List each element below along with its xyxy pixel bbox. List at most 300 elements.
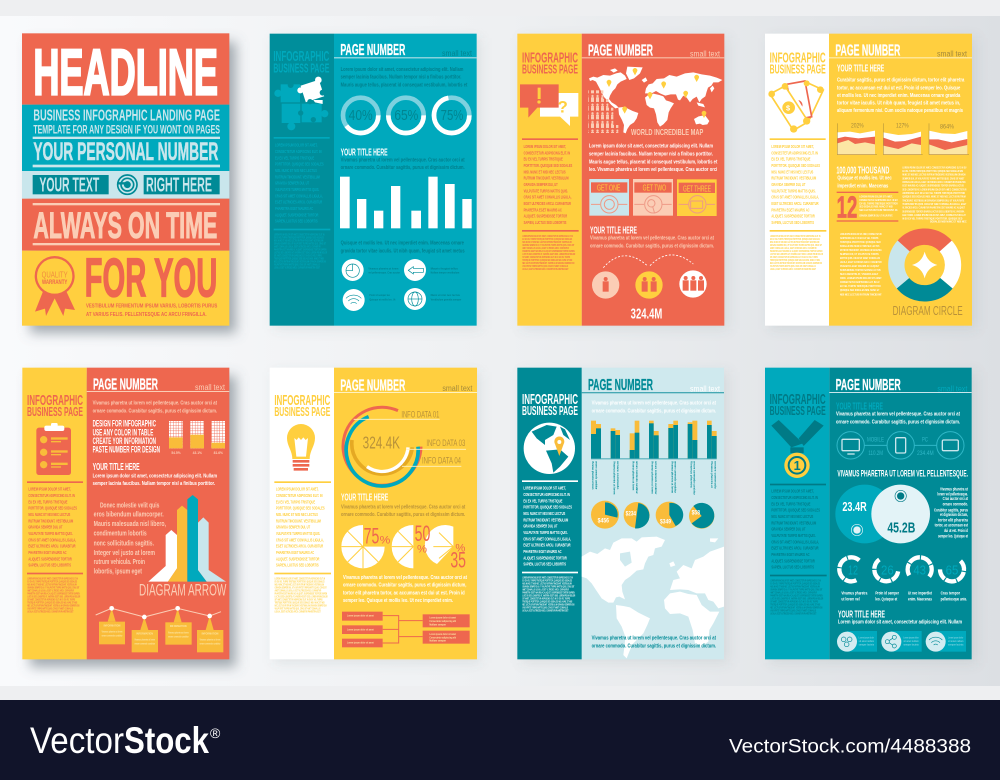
sidebar: EU EX VEL TURPIS TRISTIQUE <box>275 156 314 161</box>
sidebar: SIT AMET, CONSECTETUR ADIPISCING ELIT. IN EU EX VEL TURPIS <box>274 254 322 258</box>
sidebar: SIT AMET, CONSECTETUR ADIPISCING ELIT. IN EU EX VEL TURPIS <box>770 600 819 604</box>
flow diagram: Consectetur adipiscing elit <box>429 619 456 623</box>
sidebar: GRAVIDA SEMPER DUI, UT <box>523 524 558 529</box>
ring labels: enim. Maecenas <box>908 596 932 601</box>
bottom cards: semper lacinia <box>948 643 964 647</box>
sidebar: VULPUTATE TURPIS MATTIS QUIS. <box>275 187 319 192</box>
pie charts: 75 <box>364 523 379 548</box>
sidebar: PHARETRA EGET MAURIS AC ALIQUET. SUSPENDISSE TORTOR SAPIEN <box>274 248 327 252</box>
sidebar: SAPIEN, LUCTUS SED LOBORTIS <box>771 220 814 225</box>
sidebar: VULPUTATE TURPIS MATTIS QUIS. CRAS SIT AMET CONVALLIS <box>275 607 321 611</box>
sidebar: CRAS SIT AMET CONVALLIS LIGULA, <box>275 194 323 199</box>
ring charts: 65 <box>946 563 958 578</box>
sidebar: EU EX VEL TURPIS TRISTIQUE <box>28 500 68 505</box>
title: your title here: YOUR TITLE HERE <box>93 462 140 473</box>
sidebar: BUSINESS PAGE <box>770 62 826 77</box>
paragraph: Quisque et mollis leo. Ut nec imperdiet enim. Maecenas ornare <box>341 240 464 246</box>
sidebar: EGET ULTRICIES ARCU. CURABITUR <box>771 201 819 206</box>
right text: semper leo. Quisque et <box>938 534 968 539</box>
text column lower: RUTRUM TINCIDUNT. VESTIBULUM GRAVIDA <box>840 248 882 252</box>
diagram circle <box>885 225 965 305</box>
paragraph: Vivamus pharetra ut lorem vel pellentesque. Cras auctor orci at <box>590 236 714 242</box>
sidebar <box>517 368 582 659</box>
sidebar: EGET ULTRICIES ARCU. CURABITUR <box>275 200 322 205</box>
radial chart <box>343 407 466 486</box>
sidebar: INFOGRAPHIC <box>522 392 578 408</box>
sidebar: ALIQUET. SUSPENDISSE TORTOR <box>523 556 567 561</box>
ring charts: 26 <box>881 563 894 578</box>
sidebar: VULPUTATE TURPIS MATTIS QUIS. <box>28 531 73 536</box>
panel shadows <box>30 38 976 667</box>
sidebar: SIT AMET, CONSECTETUR ADIPISCING ELIT. IN EU EX VEL TURPIS <box>522 597 571 601</box>
sidebar: NEC LECTUS RUTRUM TINCIDUNT. VESTIBULUM GRAVIDA SEMPER DUI <box>27 604 80 608</box>
sidebar: EU EX VEL TURPIS TRISTIQUE PORTTITOR. QUISQUE SED SODALES <box>770 238 820 241</box>
sidebar: EU EX VEL TURPIS TRISTIQUE PORTTITOR. QUISQUE SED SODALES <box>274 236 324 240</box>
sidebar: EU EX VEL TURPIS TRISTIQUE <box>523 499 563 504</box>
sidebar: NEC LECTUS RUTRUM TINCIDUNT. VESTIBULUM GRAVIDA SEMPER DUI <box>770 606 823 610</box>
icon grid <box>342 259 461 311</box>
list: USE ANY COLOR IN TABLE <box>93 427 153 437</box>
ring labels: Vivamus pharetra <box>841 591 868 596</box>
indented paragraph: nonc sollicitudin sagittis. <box>94 539 154 548</box>
sidebar: LIGULA, EGET ULTRICIES ARCU. CURABITUR PHARETRA EGET <box>275 610 321 614</box>
device icons row: MOBILE <box>867 437 884 444</box>
text column right: QUISQUE SED SODALES NISI. NUNC ET NISI NEC LECTUS RUTRUM <box>902 195 966 199</box>
stat: 12: GRAVIDA SEMPER DUI, UT VULPUTATE <box>859 213 893 217</box>
sidebar: TRISTIQUE PORTTITOR. QUISQUE SED SODALES NISI. NUNC ET NISI <box>275 601 325 605</box>
people circles <box>592 270 707 299</box>
paragraph: Vivamus pharetra ut lorem vel pellentesque. Cras auctor orci at <box>343 575 467 581</box>
sidebar: VULPUTATE TURPIS MATTIS QUIS. <box>523 530 568 535</box>
pie charts: $456 <box>598 517 609 524</box>
panel: puzzle teal page <box>270 34 477 326</box>
sidebar: CONSECTETUR ADIPISCING ELIT. IN <box>524 151 570 156</box>
logo: Vector <box>30 720 124 761</box>
world map <box>582 537 724 658</box>
bottom cards: Lorem ipsum dolor <box>903 635 919 639</box>
sidebar: RUTRUM TINCIDUNT. VESTIBULUM <box>771 176 816 181</box>
sidebar: LOREM IPSUM DOLOR SIT AMET, CONSECTETUR ADIPISCING ELIT. IN <box>770 235 821 238</box>
paragraph: semper leo. Quisque et mollis leo. Ut nec imperdiet enim. <box>343 598 453 604</box>
sidebar: LOREM IPSUM DOLOR SIT AMET, CONSECTETUR ADIPISCING ELIT. IN <box>27 577 78 581</box>
bottom cards: Lorem ipsum dolor <box>859 635 874 639</box>
icon: globe with pin <box>524 423 575 474</box>
sidebar: LOREM IPSUM DOLOR SIT AMET, CONSECTETUR ADIPISCING ELIT. IN <box>274 233 325 237</box>
title: your title here: YOUR TITLE HERE <box>838 609 885 620</box>
text column right: TINCIDUNT. VESTIBULUM GRAVIDA SEMPER DUI, UT VULPUTATE <box>902 198 964 202</box>
paragraph: Mauris augue tellus, placerat id consequat vestibulum, lobortis et <box>341 82 467 88</box>
stacked bar chart: ornare commodo curabitur <box>693 461 697 496</box>
radial chart: INFO DATA 01 <box>401 409 439 419</box>
stacked bar chart: Vivamus pharetra ut lorem <box>591 461 595 490</box>
sidebar: GRAVIDA SEMPER DUI, UT <box>275 181 310 186</box>
sidebar: EU EX VEL TURPIS TRISTIQUE PORTTITOR. QUISQUE SED SODALES <box>275 580 325 584</box>
header: PAGE NUMBER <box>340 42 405 59</box>
header: small text <box>690 48 721 58</box>
waffle charts: 81.6% <box>214 450 223 455</box>
text column right: LOREM IPSUM DOLOR SIT AMET, CONSECTETUR ADIPISCING ELIT. IN EU <box>902 165 966 169</box>
sidebar: SIT AMET, CONSECTETUR ADIPISCING ELIT. IN EU EX VEL TURPIS <box>522 256 571 259</box>
cards <box>589 179 717 216</box>
sidebar: LIGULA, EGET ULTRICIES ARCU. CURABITUR PHARETRA EGET <box>770 268 817 271</box>
sidebar: INFOGRAPHIC <box>27 393 83 409</box>
header: PAGE NUMBER <box>588 43 653 60</box>
icon grid: Nunc et nisi nec lectus <box>431 293 461 297</box>
sidebar: NISI. NUNC ET NISI NEC LECTUS RUTRUM TINCIDUNT. VESTIBULUM <box>522 242 572 244</box>
pie charts: $58 <box>692 509 700 516</box>
stat: 12: CONSECTETUR ADIPISCING ELIT. IN EU <box>859 198 898 202</box>
coral band <box>22 199 229 251</box>
ring labels: Proin id semper <box>875 591 899 596</box>
sidebar: NISI. NUNC ET NISI NEC LECTUS RUTRUM TINCIDUNT. VESTIBULUM <box>275 584 324 587</box>
title: your title here: YOUR TITLE HERE <box>837 64 885 75</box>
title: HEADLINE: HEADLINE <box>33 35 218 108</box>
radial chart: INFO DATA 04 <box>422 455 461 465</box>
paragraph <box>343 575 467 604</box>
header: PAGE NUMBER <box>835 43 900 60</box>
paragraph: ornare commodo. Curabitur sagittis, purus et dignissim dictum, <box>343 583 467 589</box>
sidebar <box>22 368 87 659</box>
sidebar: CRAS SIT AMET CONVALLIS LIGULA, <box>524 195 571 200</box>
paragraph: Lorem ipsum dolor sit amet, consectetur adipiscing elit. Nullam <box>93 473 217 479</box>
indented paragraph: Donec molestie velit quis <box>100 500 159 509</box>
panel: diagram circle yellow page <box>765 34 972 326</box>
device icons row: PC <box>922 437 928 444</box>
icon: puzzle <box>274 77 328 130</box>
timeline with notes: Vivamus pharetra ut lorem <box>102 630 123 634</box>
paragraph <box>341 67 467 88</box>
sidebar: VULPUTATE TURPIS MATTIS QUIS. <box>771 189 816 194</box>
timeline with notes: Vivamus pharetra ut lorem <box>168 630 189 634</box>
paragraph: gravida tortor vitae iaculis. Ut nibh quam, feugiat sit amet metus <box>341 248 465 254</box>
header: small text <box>442 383 473 393</box>
area charts: 127% <box>896 123 909 130</box>
ring labels: leo. Quisque et <box>875 596 898 601</box>
sidebar: AMET CONVALLIS LIGULA, EGET ULTRICIES ARCU. CURABITUR <box>27 589 74 593</box>
stat: 12: 12 <box>837 189 857 224</box>
stat: 12: SED SODALES NISI. NUNC ET NISI <box>859 205 893 209</box>
right text: tortor elit pharetra <box>938 518 968 523</box>
sidebar: EU EX VEL TURPIS TRISTIQUE PORTTITOR. QUISQUE SED SODALES <box>27 580 78 584</box>
yellow band <box>22 247 229 326</box>
title: your title here: YOUR TITLE HERE <box>341 493 389 504</box>
sidebar: CRAS SIT AMET CONVALLIS LIGULA, <box>771 195 819 200</box>
pie charts: $349 <box>660 518 671 525</box>
timeline with notes: INFORMATION <box>202 631 218 635</box>
waffle charts: 54.5% <box>171 450 181 455</box>
light band: RIGHT HERE <box>146 175 212 197</box>
panel: globe light blue page <box>517 368 724 659</box>
sidebar: NISI. NUNC ET NISI NEC LECTUS <box>524 170 566 175</box>
sidebar: PORTTITOR. QUISQUE SED SODALES <box>523 505 572 510</box>
sidebar: INFOGRAPHIC <box>273 49 329 65</box>
cards: GET TWO <box>643 183 666 193</box>
sidebar: RUTRUM TINCIDUNT. VESTIBULUM <box>276 519 321 524</box>
timeline with notes: ornare commodo curabitur <box>200 642 220 646</box>
venn diagram: 45.2B <box>887 521 915 537</box>
header: small text <box>937 48 968 58</box>
cards: GET ONE <box>597 183 621 193</box>
people pictogram <box>588 90 618 133</box>
stat: 12: NEC LECTUS RUTRUM TINCIDUNT. VE <box>859 208 898 212</box>
sidebar: PORTTITOR. QUISQUE SED SODALES <box>771 163 820 168</box>
ring charts: 43 <box>913 563 926 578</box>
sidebar: NISI. NUNC ET NISI NEC LECTUS RUTRUM TINCIDUNT. VESTIBULUM <box>522 583 572 586</box>
sidebar: CRAS SIT AMET CONVALLIS LIGULA, <box>28 538 76 543</box>
sidebar: NISI. NUNC ET NISI NEC LECTUS <box>523 511 566 516</box>
header: PAGE NUMBER <box>836 377 901 394</box>
sidebar: PHARETRA EGET MAURIS AC <box>771 552 810 557</box>
sidebar: RUTRUM TINCIDUNT. VESTIBULUM <box>523 518 568 523</box>
text column right: EGET MAURIS AC ALIQUET. SUSPENDISSE TORTOR SAPIEN LUCTUS <box>902 184 964 188</box>
waffle charts: 43.1% <box>193 450 202 455</box>
stacked bar chart <box>591 421 717 496</box>
text column right: EGET ODIO. LOREM IPSUM DOLOR SIT AMET, CONSECTETUR ELIT <box>902 213 966 217</box>
header: PAGE NUMBER <box>588 377 653 394</box>
timeline with notes: INFORMATION <box>136 631 153 635</box>
text column lower: TRISTIQUE PORTTITOR. QUISQUE SED <box>840 240 881 244</box>
sidebar: LUCTUS SED LOBORTIS AT, VIVERRA EGET ODIO. LOREM IPSUM DOLOR <box>770 253 823 256</box>
paragraph: ornare commodo. Curabitur sagittis, purus et dignissim dictum. <box>590 243 714 249</box>
paragraph: ornare commodo. Curabitur sagittis, purus et dignissim dictum. <box>341 512 466 518</box>
paragraph <box>592 401 716 414</box>
ring labels <box>841 591 967 601</box>
sidebar <box>765 34 829 326</box>
sidebar: LUCTUS SED LOBORTIS AT, VIVERRA EGET ODIO. LOREM IPSUM DOLOR <box>275 595 328 599</box>
bottom cards: sit amet nullam <box>903 639 919 643</box>
map caption: WORLD INCREDIBLE MAP <box>631 127 703 137</box>
radial chart: 324.4K <box>363 432 400 452</box>
text column lower: LIGULA, EGET ULTRICIES ARCU. CURABITUR <box>840 260 882 264</box>
paragraph: et mollis leo. Ut nec imperdiet enim. Maecenas ornare gravida <box>837 93 961 99</box>
flow diagram: Lorem ipsum dolor sit amet <box>347 614 374 618</box>
sidebar: CONSECTETUR ADIPISCING ELIT. IN <box>28 493 75 498</box>
header: small text <box>937 383 968 393</box>
indented paragraph: condimentum lobortis <box>94 529 147 538</box>
sidebar: AMET CONVALLIS LIGULA, EGET ULTRICIES ARCU. CURABITUR <box>274 245 321 249</box>
indented paragraph: eros bibendum ullamcorper. <box>94 510 164 519</box>
sidebar: PORTTITOR. QUISQUE SED SODALES <box>524 163 573 168</box>
sidebar: GRAVIDA SEMPER DUI, UT VULPUTATE TURPIS MATTIS QUIS. CRAS SIT <box>27 586 80 590</box>
paragraph: semper lacinia faucibus. Nullam tempor nisl a finibus porttitor. <box>93 481 215 487</box>
header: small text <box>690 383 721 393</box>
icon: speech bubbles <box>520 84 578 126</box>
sidebar: LUCTUS SED LOBORTIS AT, VIVERRA EGET ODIO. LOREM IPSUM DOLOR <box>27 595 81 599</box>
paragraph: Lorem ipsum dolor sit amet, consectetur adipiscing elit. Nullam <box>341 67 463 73</box>
sidebar: GRAVIDA SEMPER DUI, UT <box>276 525 311 530</box>
sidebar: VULPUTATE TURPIS MATTIS QUIS. CRAS SIT AMET CONVALLIS <box>522 265 568 268</box>
paragraph: Vivamus pharetra ut lorem vel pellentesque. Cras auctor orci at <box>93 401 217 407</box>
sidebar: RUTRUM TINCIDUNT. VESTIBULUM <box>524 176 569 181</box>
sidebar <box>270 34 334 326</box>
list: PASTE NUMBER FOR DESIGN <box>93 445 160 455</box>
sidebar: SIT AMET, CONSECTETUR ADIPISCING ELIT. IN EU EX VEL TURPIS <box>770 256 818 259</box>
teal band <box>22 105 229 171</box>
sidebar: BUSINESS PAGE <box>522 62 578 77</box>
sidebar <box>765 368 829 659</box>
panel: world map coral page <box>517 34 724 326</box>
world map <box>589 67 722 133</box>
venn diagram <box>835 485 930 543</box>
sidebar: LIGULA, EGET ULTRICIES ARCU. CURABITUR PHARETRA EGET <box>522 268 569 271</box>
sidebar: INFOGRAPHIC <box>522 50 578 66</box>
indented paragraph: rutrum vehicula. Proin <box>94 557 145 566</box>
icon grid: Quisque et mollis leo. Ut <box>369 297 395 301</box>
text column right: EX VEL TURPIS TRISTIQUE PORTTITOR. QUISQUE SED SODALES NISI <box>902 169 963 173</box>
flow diagram: Lorem ipsum dolor sit amet <box>347 641 374 645</box>
text column lower: SUSPENDISSE TORTOR SAPIEN LUCTUS <box>840 268 881 272</box>
text column lower: MATTIS QUIS. CRAS SIT AMET CONVALLIS <box>840 256 880 260</box>
ring labels: ut lorem vel <box>841 596 860 601</box>
sidebar: NISI. NUNC ET NISI NEC LECTUS <box>276 512 318 517</box>
sidebar: AMET CONVALLIS LIGULA, EGET ULTRICIES ARCU. CURABITUR <box>522 247 569 250</box>
stacked bar chart: ornare commodo curabitur <box>674 461 678 494</box>
sidebar: GRAVIDA SEMPER DUI, UT <box>524 182 558 187</box>
paragraph: tortor elit pharetra tortor, ac accumsan est dui ut est. Proin id <box>343 590 465 596</box>
sidebar: SAPIEN, LUCTUS SED LOBORTIS <box>276 563 319 568</box>
sidebar: LUCTUS SED LOBORTIS AT, VIVERRA EGET ODIO. LOREM IPSUM DOLOR <box>522 594 576 598</box>
paragraph <box>341 504 466 518</box>
panel: info data yellow page <box>270 368 477 659</box>
yellow band: VESTIBULUM FERMENTUM IPSUM VARIUS, LOBORTIS PURUS <box>86 303 218 309</box>
flow diagram: Lorem ipsum dolor sit amet <box>429 616 456 620</box>
paragraph: Vivamus pharetra ut lorem vel pellentesque. Cras auctor orci at <box>341 157 465 163</box>
text column right: SODALES NISI NUNC ET NISI NEC <box>930 220 967 224</box>
icon grid: Proin id semper leo <box>369 293 390 297</box>
pie charts: 50 <box>415 521 430 546</box>
sidebar: NEC LECTUS RUTRUM TINCIDUNT. VESTIBULUM GRAVIDA SEMPER DUI <box>770 262 822 265</box>
text column lower: ODIO. LOREM IPSUM DOLOR SIT AMET <box>840 276 882 280</box>
flow diagram: Consectetur adipiscing elit <box>429 635 456 639</box>
icon: speech bubbles: ? <box>558 97 568 116</box>
flow diagram <box>342 612 470 647</box>
timeline with notes: Vivamus pharetra ut lorem <box>134 638 155 642</box>
sidebar: EU EX VEL TURPIS TRISTIQUE PORTTITOR. QUISQUE SED SODALES <box>522 579 573 583</box>
sidebar: NISI. NUNC ET NISI NEC LECTUS <box>275 168 317 173</box>
paragraph: Vivamus pharetra ut lorem vel pellentesque. Cras auctor orci at <box>592 635 716 641</box>
title: your title here: YOUR TITLE HERE <box>590 226 637 237</box>
paragraph: semper lacinia faucibus. Nullam tempor nisl a finibus porttitor. <box>341 75 462 81</box>
device icons row: 234.4M <box>917 450 934 457</box>
sidebar: PHARETRA EGET MAURIS AC <box>276 550 314 555</box>
area charts: 202% <box>851 123 864 130</box>
venn diagram: 23.4R <box>842 499 867 514</box>
icon grid: Mauris feugiat tellus <box>431 266 459 270</box>
icon: clipboard <box>36 423 71 475</box>
footer bar <box>0 700 1000 780</box>
icon: quality badge: WARRANTY <box>42 280 67 286</box>
paragraph: Vivamus pharetra ut lorem vel pellentesque. Cras auctor orci at <box>592 401 716 407</box>
sidebar: SAPIEN, LUCTUS SED LOBORTIS <box>28 563 71 568</box>
sidebar: VULPUTATE TURPIS MATTIS QUIS. CRAS SIT AMET CONVALLIS <box>770 265 816 268</box>
sidebar: PHARETRA EGET MAURIS AC ALIQUET. SUSPENDISSE TORTOR SAPIEN <box>27 592 80 596</box>
stacked bar chart: Vivamus pharetra <box>689 461 693 488</box>
ring labels: pellentesque ante. <box>941 596 967 601</box>
icon: quality badge <box>35 256 75 316</box>
teal band: TEMPLATE FOR ANY DESIGN IF YOU WONT ON PAGES <box>33 122 220 136</box>
panel: headline cover <box>22 33 229 326</box>
text column right: NUNC ET NISI NEC LECTUS RUTRUM TINCIDUNT. VESTIBULUM GRAVIDA <box>902 173 966 177</box>
radial chart: INFO DATA 03 <box>426 438 465 448</box>
ring labels: Ut nec imperdiet <box>908 591 932 596</box>
sidebar: GRAVIDA SEMPER DUI, UT <box>771 182 806 187</box>
sidebar: LOREM IPSUM DOLOR SIT AMET, CONSECTETUR ADIPISCING ELIT. IN <box>275 577 325 581</box>
sidebar: BUSINESS PAGE <box>273 60 330 75</box>
sidebar: AMET CONVALLIS LIGULA, EGET ULTRICIES ARCU. CURABITUR <box>522 588 569 592</box>
sidebar: BUSINESS PAGE <box>274 404 331 419</box>
sidebar: EU EX VEL TURPIS TRISTIQUE <box>524 157 563 162</box>
sidebar: CONSECTETUR ADIPISCING ELIT. IN <box>275 149 322 154</box>
sidebar: EGET ULTRICIES ARCU. CURABITUR <box>771 546 819 551</box>
text column lower: SEMPER DUI, UT VULPUTATE TURPIS <box>840 252 879 256</box>
text column right: IN EU EX VEL TURPIS TRISTIQUE PORTTITOR. QUISQUE SED <box>902 217 962 221</box>
stat: 100,000 thousand <box>836 165 892 189</box>
list: DESIGN FOR INFOGRAPHIC <box>93 418 156 428</box>
text column right: SEMPER DUI, UT VULPUTATE TURPIS MATTIS QUIS. CRAS SIT AMET <box>902 176 965 180</box>
text column right: SED LOBORTIS AT. LOREM IPSUM DOLOR SIT AMET, CONSECTETUR <box>902 187 966 191</box>
right text: ornare commodo. <box>943 502 968 507</box>
sidebar: PHARETRA EGET MAURIS AC ALIQUET. SUSPENDISSE TORTOR SAPIEN <box>770 250 823 253</box>
sidebar: RUTRUM TINCIDUNT. VESTIBULUM <box>28 519 73 524</box>
device icons row: 110.2M <box>868 450 883 457</box>
right text: Cras auctor orci at <box>943 496 968 501</box>
light band: YOUR TEXT <box>39 175 99 197</box>
sidebar: LOREM IPSUM DOLOR SIT AMET, <box>771 144 814 149</box>
sidebar: VULPUTATE TURPIS MATTIS QUIS. <box>276 531 320 536</box>
sidebar: LUCTUS SED LOBORTIS AT, VIVERRA EGET ODIO. LOREM IPSUM DOLOR <box>522 253 576 256</box>
right text: Curabitur sagittis, purus <box>934 507 968 512</box>
sidebar: PORTTITOR. QUISQUE SED SODALES <box>771 508 820 513</box>
sidebar: EU EX VEL TURPIS TRISTIQUE PORTTITOR. QUISQUE SED SODALES <box>770 582 821 586</box>
sidebar: ALIQUET. SUSPENDISSE TORTOR <box>275 213 319 218</box>
donut charts: 65% <box>394 108 418 124</box>
sidebar: PORTTITOR. QUISQUE SED SODALES <box>28 506 77 511</box>
header: PAGE NUMBER <box>340 378 405 395</box>
sidebar: LOREM IPSUM DOLOR SIT AMET, <box>771 489 814 494</box>
sidebar: VULPUTATE TURPIS MATTIS QUIS. CRAS SIT AMET CONVALLIS <box>274 263 320 267</box>
sidebar: PHARETRA EGET MAURIS AC <box>771 208 810 213</box>
sidebar: RUTRUM TINCIDUNT. VESTIBULUM <box>275 175 320 180</box>
sidebar: SAPIEN, LUCTUS SED LOBORTIS <box>275 219 318 224</box>
logo: Stock <box>124 720 209 761</box>
donut charts: 40% <box>349 108 373 124</box>
icon: quality badge: QUALITY <box>42 269 68 279</box>
text column lower: NISI NEC LECTUS RUTRUM TINCIDUNT <box>840 293 882 297</box>
text column lower: LOREM IPSUM DOLOR SIT AMET, CONSECTETUR <box>840 232 882 236</box>
indented paragraph <box>94 500 166 575</box>
sidebar: EU EX VEL TURPIS TRISTIQUE <box>276 500 315 505</box>
text column right: ULTRICIES ARCU. CURABITUR PHARETRA EGET MAURIS AC ALIQUET <box>902 206 965 210</box>
sidebar: PHARETRA EGET MAURIS AC ALIQUET. SUSPENDISSE TORTOR SAPIEN <box>770 594 823 598</box>
sidebar: VULPUTATE TURPIS MATTIS QUIS. CRAS SIT AMET CONVALLIS <box>522 606 568 610</box>
sidebar: INFOGRAPHIC <box>770 392 826 408</box>
sidebar: EGET ULTRICIES ARCU. CURABITUR <box>523 543 571 548</box>
stacked bar chart: ornare commodo curabitur <box>654 461 658 495</box>
paragraph: ornare commodo. Curabitur sagittis, purus et dignissim dictum. <box>341 165 465 171</box>
sidebar: NISI. NUNC ET NISI NEC LECTUS <box>771 170 814 175</box>
pie charts <box>591 501 714 529</box>
icon grid: Vivamus pharetra ut lorem <box>368 266 399 270</box>
bar chart <box>340 177 472 228</box>
sidebar: PHARETRA EGET MAURIS AC ALIQUET. SUSPENDISSE TORTOR SAPIEN <box>522 250 575 253</box>
title: your title here: YOUR TITLE HERE <box>836 401 883 412</box>
header: PAGE NUMBER <box>93 376 158 393</box>
sidebar: EU EX VEL TURPIS TRISTIQUE <box>771 502 811 507</box>
pie charts <box>341 521 466 572</box>
paragraph: Lorem ipsum dolor sit amet, consectetur adipiscing elit. Nullam <box>589 144 713 150</box>
sidebar: ALIQUET. SUSPENDISSE TORTOR <box>771 559 815 564</box>
icon grid: Nullam tempor vestibulum <box>431 271 460 275</box>
